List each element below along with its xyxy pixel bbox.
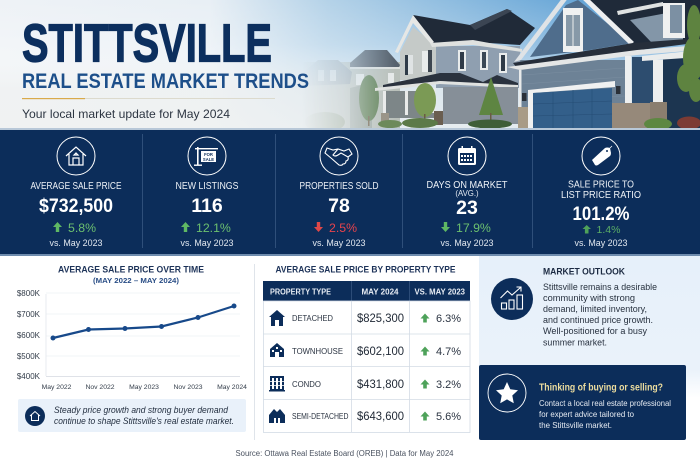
stat: properties sold: 2.5% [329, 221, 357, 235]
row: semi-detached: $643,600 [357, 411, 404, 423]
icon: for sale sign: SALE [203, 157, 214, 162]
row: condo: CONDO [292, 380, 321, 389]
row: condo: 3.2% [436, 379, 461, 391]
table header: MAY 2024 [362, 288, 399, 296]
row: detached: $825,300 [357, 313, 404, 325]
stat: sale price to list price ratio: 101.2% [572, 203, 630, 225]
outlook body: and continued price growth. [543, 315, 653, 325]
callout: chart takeaway [18, 399, 246, 432]
chart subtitle: (MAY 2022 – MAY 2024) [93, 276, 180, 285]
stat: properties sold: vs. May 2023 [312, 238, 366, 248]
y axis labels [17, 289, 41, 381]
panel: call to action: the Stittsville market. [539, 420, 612, 430]
header accent rule [22, 98, 275, 99]
x axis labels: May 2023 [129, 384, 159, 391]
stat: properties sold: PROPERTIES SOLD [300, 181, 378, 192]
table header: VS. MAY 2023 [414, 288, 466, 296]
stat: new listings: 12.1% [196, 221, 231, 235]
stat: days on market [426, 137, 508, 248]
stat: new listings: 116 [191, 195, 223, 217]
row: semi-detached: SEMI-DETACHED [292, 412, 349, 421]
table header [263, 281, 470, 301]
stat: sale price to list price ratio: vs. May 2023 [574, 238, 628, 248]
stat: properties sold: 78 [328, 195, 350, 217]
y axis labels: $500K [17, 352, 41, 361]
icon: house [57, 137, 95, 175]
middle house [375, 9, 535, 128]
far-left houses, faded [310, 50, 400, 128]
outlook body [543, 282, 657, 348]
stat: days on market: 23 [456, 197, 478, 219]
callout: chart takeaway: continue to shape Stittsville's real estate market. [54, 416, 234, 426]
panel: call to action: for expert advice tailored to [539, 409, 634, 419]
outlook body: Stittsville remains a desirable [543, 282, 657, 292]
panel: line chart [17, 264, 247, 391]
icon: for sale sign: FOR [204, 152, 213, 157]
stat: new listings [176, 137, 239, 248]
row: detached: DETACHED [292, 314, 333, 323]
y axis labels: $700K [17, 310, 41, 319]
outlook body: demand, limited inventory, [543, 304, 647, 314]
y axis labels: $800K [17, 289, 41, 298]
row: townhouse: 4.7% [436, 346, 461, 358]
table title: AVERAGE SALE PRICE BY PROPERTY TYPE [276, 264, 456, 276]
row: townhouse [270, 343, 461, 358]
row: semi-detached [269, 409, 461, 423]
x axis labels: Nov 2022 [85, 384, 115, 391]
stat: days on market: 17.9% [456, 221, 491, 235]
stat: sale price to list price ratio [561, 137, 641, 248]
panel: call to action [479, 365, 686, 440]
big house right [507, 0, 700, 130]
stats band [0, 128, 700, 256]
icon: for sale sign [188, 137, 226, 175]
stat: average sale price: 5.8% [68, 221, 96, 235]
outlook heading: MARKET OUTLOOK [543, 266, 625, 278]
source footer: Source: Ottawa Real Estate Board (OREB) | Data for May 2024 [236, 449, 454, 458]
stat: new listings: vs. May 2023 [180, 238, 234, 248]
panel: table by property type [263, 264, 470, 432]
stat: average sale price: AVERAGE SALE PRICE [30, 181, 122, 192]
stat: average sale price: vs. May 2023 [50, 238, 102, 248]
table header: PROPERTY TYPE [270, 288, 332, 296]
row: townhouse: TOWNHOUSE [292, 347, 343, 356]
row: semi-detached: 5.6% [436, 411, 461, 423]
stat: sale price to list price ratio: 1.4% [596, 224, 620, 236]
row: townhouse: $602,100 [357, 346, 404, 358]
row: detached: 6.3% [436, 313, 461, 325]
stat: days on market: (AVG.) [455, 189, 479, 198]
stat: sale price to list price ratio: LIST PRICE RATIO [561, 190, 641, 201]
stat: properties sold [300, 137, 378, 248]
y axis labels: $600K [17, 331, 41, 340]
panel: market outlook [479, 256, 700, 398]
chart title: AVERAGE SALE PRICE OVER TIME [58, 264, 204, 276]
outlook body: Well-positioned for a busy [543, 326, 647, 336]
stat: new listings: NEW LISTINGS [176, 181, 239, 192]
callout: chart takeaway: Steady price growth and strong buyer demand [54, 405, 229, 415]
x axis labels: May 2022 [42, 384, 72, 391]
stat: sale price to list price ratio: SALE PRICE TO [568, 180, 634, 190]
row: detached [269, 310, 461, 326]
outlook body: summer market. [543, 338, 607, 348]
tagline: Your local market update for May 2024 [22, 107, 230, 121]
panel: call to action: Contact a local real estate professional [539, 398, 671, 408]
row: condo: $431,800 [357, 379, 404, 391]
icon: handshake [320, 137, 358, 175]
panel: call to action: Thinking of buying or selling? [539, 382, 663, 394]
subtitle: real estate market trends: REAL ESTATE MARKET TRENDS [22, 70, 309, 93]
stat: average sale price: $732,500 [39, 195, 113, 217]
icon: growth chart [491, 278, 533, 320]
outlook body: community with strong [543, 293, 635, 303]
title: STITTSVILLE: STITTSVILLE [22, 14, 272, 74]
header banner photo: houses [0, 0, 700, 132]
stat: days on market: DAYS ON MARKET [426, 180, 508, 191]
stat: days on market: vs. May 2023 [440, 238, 494, 248]
x axis labels: Nov 2023 [173, 384, 203, 391]
icon: calendar [448, 137, 486, 175]
row: condo [269, 376, 461, 392]
icon: house badge [25, 406, 45, 426]
stat: average sale price [30, 137, 122, 248]
icon: price tag [582, 137, 620, 175]
icon: star [488, 374, 526, 412]
data line [50, 304, 236, 340]
y axis labels: $400K [17, 372, 41, 381]
x axis labels: May 2024 [217, 384, 247, 391]
x axis labels [42, 384, 247, 391]
